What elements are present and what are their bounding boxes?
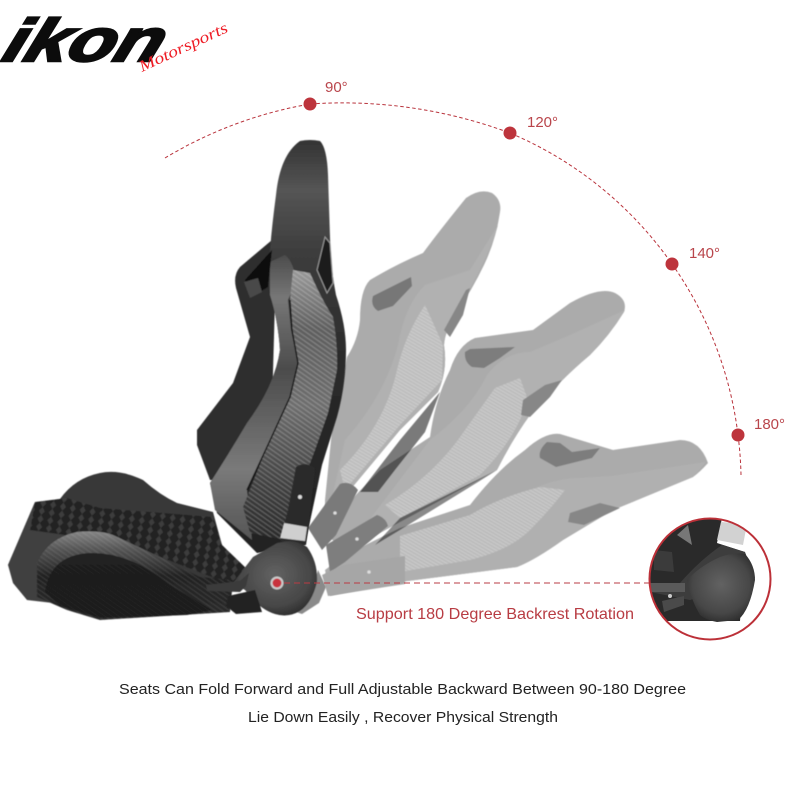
recline mechanism <box>206 464 371 615</box>
ghost brackets <box>308 483 405 596</box>
dashed pointer line <box>284 582 650 584</box>
marker 180 <box>732 416 785 442</box>
description line 1: Seats Can Fold Forward and Full Adjustable Backward Between 90-180 Degree <box>119 681 686 698</box>
marker 120: 120° <box>527 114 558 131</box>
ghost seat backs <box>322 191 708 596</box>
cushion rear <box>60 472 245 585</box>
ghost edge shade band <box>360 392 440 492</box>
inset detail circle <box>648 518 770 640</box>
marker 140 <box>666 245 720 270</box>
bracket 140 <box>326 515 388 572</box>
inset ring <box>650 518 770 640</box>
ghost 140 lower band <box>375 470 497 545</box>
description line 2: Lie Down Easily , Recover Physical Strength <box>248 709 558 726</box>
inset image content <box>648 518 755 622</box>
marker 90: 90° <box>325 79 348 96</box>
bracket plate <box>280 523 307 541</box>
marker 140: 140° <box>689 245 720 262</box>
rotation arc with angle markers <box>165 79 785 475</box>
bracket rivet <box>298 495 302 499</box>
bracket 120 <box>308 483 358 550</box>
main seat back <box>197 140 346 553</box>
ghost seat back 120 degrees <box>325 191 500 530</box>
logo: ikon motorsports <box>0 8 231 76</box>
rivets <box>333 511 371 574</box>
stitch line <box>247 300 298 490</box>
bracket 180 <box>322 556 405 596</box>
seat cushion <box>8 472 248 620</box>
marker 120 <box>504 114 558 140</box>
rotation caption: Support 180 Degree Backrest Rotation <box>356 606 634 623</box>
dashed arc <box>165 103 741 475</box>
pivot rim <box>296 570 326 614</box>
side hole right <box>317 237 333 293</box>
bolster <box>210 255 298 540</box>
pivot dot <box>270 576 284 590</box>
logo script: Motorsports <box>135 20 231 76</box>
quilted centre panel <box>8 498 248 585</box>
ghost seat back 140 degrees <box>322 291 625 552</box>
pivot housing <box>233 541 317 615</box>
front shell <box>210 140 346 553</box>
ghost seat back 180 degrees <box>325 434 708 596</box>
marker 180: 180° <box>754 416 785 433</box>
description text <box>119 681 686 726</box>
rear shell <box>197 240 275 480</box>
marker 90 <box>304 79 348 110</box>
carbon side panel <box>37 531 233 620</box>
carbon panel <box>243 270 337 540</box>
side hole left <box>244 250 272 298</box>
main bracket <box>280 464 315 545</box>
lever <box>206 573 262 614</box>
cushion left edge <box>8 502 65 603</box>
